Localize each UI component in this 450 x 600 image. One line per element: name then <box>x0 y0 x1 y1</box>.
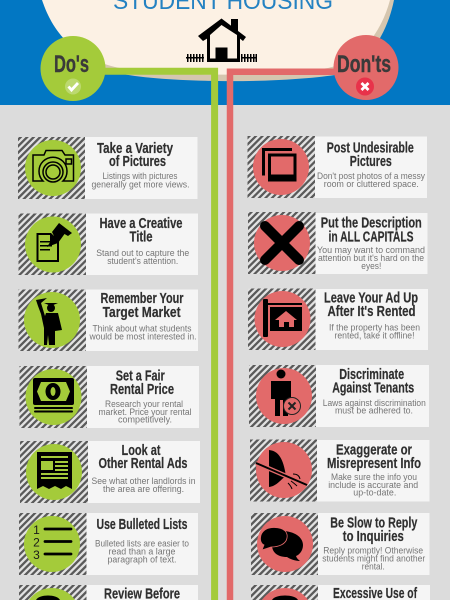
dont card: Post Undesirable Pictures <box>248 136 427 198</box>
dont card: Be Slow to Reply to Inquiries: Be Slow to Reply <box>330 516 417 532</box>
dont card: Exaggerate or Misrepresent Info: include is accurate and <box>328 480 418 490</box>
do card: Set a Fair Rental Price: Research your rental <box>105 399 183 409</box>
icon: banknotes <box>33 378 74 412</box>
dont card: Post Undesirable Pictures: Pictures <box>350 154 392 170</box>
icon: numbered list: 2 <box>33 536 40 550</box>
do card: Review Before <box>19 585 198 600</box>
do card: Remember Your Target Market: would be most interested in. <box>89 332 196 342</box>
do card: Use Bulleted Lists: Bulleted lists are easier to <box>95 539 189 549</box>
icon: stacked photos <box>262 148 296 182</box>
icon: newspaper <box>37 452 72 489</box>
icon: pinned note <box>36 223 72 262</box>
dont card: Exaggerate or Misrepresent Info: up-to-date. <box>353 487 396 497</box>
icon: black X <box>265 226 299 260</box>
dont card: Leave Your Ad Up After It's Rented: After It's Rented <box>328 304 416 320</box>
connector: green line <box>100 71 215 600</box>
dont card: Leave Your Ad Up After It's Rented <box>248 288 428 350</box>
do card: Remember Your Target Market: Remember Your <box>100 291 184 307</box>
dont card: Exaggerate or Misrepresent Info: Exaggerate or <box>336 443 412 459</box>
dont card: Be Slow to Reply to Inquiries: rental. <box>362 561 385 571</box>
icon: numbered list: 3 <box>33 548 40 562</box>
do card: Remember Your Target Market: Think about what students <box>92 324 192 334</box>
dont card: Leave Your Ad Up After It's Rented: If the property has been <box>329 323 420 333</box>
dont card: Put the Description in ALL CAPITALS: You may want to command <box>317 245 425 255</box>
do card: Take a Variety of Pictures: generally get more views. <box>92 180 190 190</box>
dont card: Post Undesirable Pictures: Post Undesirable <box>327 140 414 156</box>
do card: Set a Fair Rental Price: Rental Price <box>110 382 174 398</box>
do card: Look at Other Rental Ads: the area are offering. <box>103 484 184 494</box>
do card: Have a Creative Title: Title <box>130 230 152 246</box>
dont card: Put the Description in ALL CAPITALS: attention but it's hard on the <box>318 253 424 263</box>
header: cream title blob <box>42 0 394 81</box>
dont card: Discriminate Against Tenants: must be adhered to. <box>335 406 413 416</box>
dont card: Be Slow to Reply to Inquiries: Reply promptly! Otherwise <box>323 546 423 556</box>
dont card: Exaggerate or Misrepresent Info <box>250 440 430 502</box>
do card: Use Bulleted Lists <box>19 513 198 575</box>
do card: Have a Creative Title: Stand out to capture the <box>96 248 189 258</box>
do card: Have a Creative Title <box>18 214 198 275</box>
badge: Don'ts: Don'ts <box>337 51 391 78</box>
do card: Set a Fair Rental Price <box>20 366 199 428</box>
dont card: Put the Description in ALL CAPITALS: in ALL CAPITALS <box>328 230 414 246</box>
dont card: Put the Description in ALL CAPITALS: Put the Description <box>321 216 422 232</box>
do card: Have a Creative Title: Have a Creative <box>100 216 182 232</box>
icon: camera <box>33 150 74 182</box>
dont card: Leave Your Ad Up After It's Rented: rented, take it offline! <box>334 330 414 340</box>
dont card: Discriminate Against Tenants: Laws against discrimination <box>323 398 426 408</box>
do card: Set a Fair Rental Price: competitively. <box>118 415 172 425</box>
dont card: Post Undesirable Pictures: Don't post photos of a messy <box>317 171 425 181</box>
do card: Take a Variety of Pictures: Listings with pictures <box>102 171 178 181</box>
dont card: Put the Description in ALL CAPITALS: eyes! <box>361 261 381 271</box>
dont card: Exaggerate or Misrepresent Info: Misrepresent Info <box>327 456 421 472</box>
dont card: Post Undesirable Pictures: room or cluttered space. <box>324 179 419 189</box>
badge: Don'ts <box>334 35 398 100</box>
icon: person with no symbol <box>271 370 300 416</box>
do card: Look at Other Rental Ads <box>20 441 200 503</box>
dont card: Discriminate Against Tenants: Against Tenants <box>332 381 414 397</box>
do card: Remember Your Target Market: Target Market <box>103 305 181 321</box>
do card: Take a Variety of Pictures: Take a Variety <box>97 141 173 157</box>
do card: Use Bulleted Lists: Use Bulleted Lists <box>96 517 188 533</box>
do card: Remember Your Target Market <box>18 290 198 351</box>
dont card: Be Slow to Reply to Inquiries: to Inquiries <box>343 529 404 545</box>
dont card: Leave Your Ad Up After It's Rented: Leave Your Ad Up <box>324 291 418 307</box>
do card: Use Bulleted Lists: paragraph of text. <box>108 555 176 565</box>
do card: Take a Variety of Pictures: of Pictures <box>109 154 166 170</box>
badge: Do's: Do's <box>54 51 89 78</box>
dont card: Discriminate Against Tenants <box>249 365 429 427</box>
icon: house with fence <box>186 18 257 62</box>
dont card: Put the Description in ALL CAPITALS <box>248 212 428 274</box>
dont card: Be Slow to Reply to Inquiries <box>251 513 430 575</box>
do card: Set a Fair Rental Price: market. Price your rental <box>98 407 192 417</box>
do card: Take a Variety of Pictures <box>18 137 198 199</box>
do card: Look at Other Rental Ads: See what other landlords in <box>92 476 196 486</box>
badge: Do's <box>40 36 106 101</box>
do card: Set a Fair Rental Price: Set a Fair <box>116 369 165 385</box>
dont card: Exaggerate or Misrepresent Info: Make sure the info you <box>331 472 417 482</box>
do card: Look at Other Rental Ads: Look at <box>122 443 161 459</box>
connector: red line <box>230 72 340 600</box>
dont card: Discriminate Against Tenants: Discriminate <box>339 367 404 383</box>
icon: numbered list: 1 <box>33 523 40 537</box>
dont card: Be Slow to Reply to Inquiries: students might find another <box>322 554 425 564</box>
icon: rental sign with house <box>263 299 302 337</box>
icon: graduate <box>36 298 62 345</box>
icon: speech bubbles <box>260 528 303 561</box>
icon: crossed-out megaphone <box>256 450 307 489</box>
do card: Look at Other Rental Ads: Other Rental Ads <box>98 456 188 472</box>
icon: numbered list <box>33 523 71 562</box>
do card: Use Bulleted Lists: read than a large <box>108 547 176 557</box>
do card: Have a Creative Title: student's attention. <box>107 256 178 266</box>
header: blue band <box>0 0 450 105</box>
dont card: Excessive Use of <box>251 585 430 600</box>
